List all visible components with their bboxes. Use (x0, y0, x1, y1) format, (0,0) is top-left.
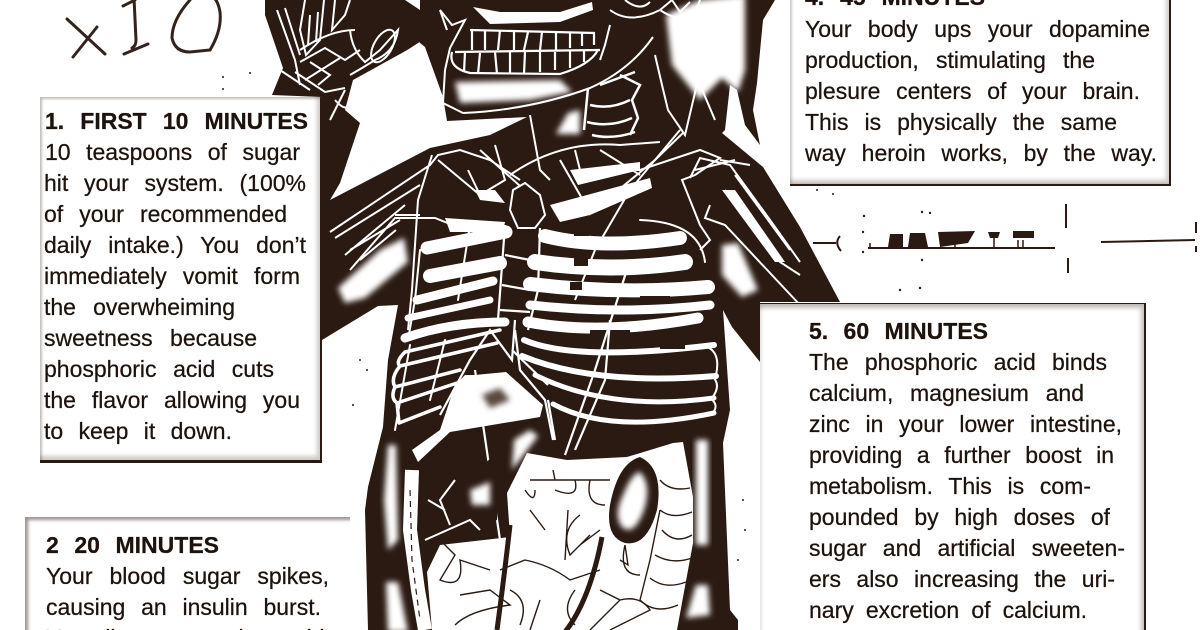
text: 60 minutes: providing a further boost in (809, 442, 1114, 468)
text: 45 minutes: plesure centers of your brain. (805, 78, 1140, 104)
hand bones (277, 0, 420, 120)
text: 60 minutes: ers also increasing the uri- (809, 566, 1115, 592)
text: 60 minutes: pounded by high doses of (809, 504, 1110, 530)
text: 45 minutes: Your body ups your dopamine (805, 16, 1150, 42)
panel 1: first 10 minutes (40, 97, 322, 463)
right ribs (522, 220, 717, 422)
text: 60 minutes: metabolism. This is com- (809, 473, 1091, 499)
bowel folds (425, 470, 692, 630)
text: first 10 minutes: hit your system. (100% (44, 170, 306, 196)
neck vertebrae (584, 72, 640, 137)
text: 60 minutes: 5. 60 MINUTES (809, 318, 988, 344)
panel 4: 45 minutes (790, 0, 1171, 186)
text: first 10 minutes: phosphoric acid cuts (44, 356, 274, 382)
text: 60 minutes: sugar and artificial sweeten- (809, 535, 1125, 561)
text: 60 minutes: The phosphoric acid binds (809, 349, 1107, 375)
print specks (222, 72, 931, 561)
text: first 10 minutes: sweetness because (44, 325, 257, 351)
ureters (497, 525, 602, 630)
spine and central lines (440, 225, 630, 540)
text: 20 minutes: Your blood sugar spikes, (46, 563, 329, 589)
kidneys (455, 450, 659, 543)
mouth and teeth (451, 30, 600, 74)
intestine mass (427, 442, 693, 630)
text: 45 minutes: This is physically the same (805, 109, 1117, 135)
descending bone strip (410, 470, 425, 630)
jaw and skull outline (440, 0, 715, 205)
left ribs (393, 225, 506, 430)
liver shadow (482, 388, 510, 408)
white gap between hand and shoulder (330, 43, 527, 200)
text: first 10 minutes: to keep it down. (44, 418, 232, 444)
bone strip hatching (410, 490, 420, 620)
highlights on neck, arms and torso (338, 0, 758, 630)
sternum outline (510, 183, 545, 228)
text: first 10 minutes: the flavor allowing you (44, 387, 300, 413)
body silhouette (265, 0, 840, 630)
syringe (813, 204, 1196, 273)
text: 60 minutes: zinc in your lower intestine, (809, 411, 1122, 437)
collar bones and shoulders (330, 115, 800, 330)
text: 45 minutes: way heroin works, by the way. (805, 140, 1157, 166)
text: first 10 minutes: daily intake.) You don’t (44, 232, 306, 258)
text: first 10 minutes: of your recommended (44, 201, 287, 227)
text: 45 minutes: production, stimulating the (805, 47, 1095, 73)
text: 60 minutes: nary excretion of calcium. (809, 597, 1087, 623)
liver wedge (412, 372, 543, 462)
text: first 10 minutes: the overwheiming (44, 294, 235, 320)
text: first 10 minutes: 1. FIRST 10 MINUTES (45, 108, 308, 134)
text: 20 minutes: 2 20 MINUTES (46, 532, 219, 558)
shoulder white wedges (445, 162, 785, 262)
dark rib bars (570, 228, 685, 349)
text: first 10 minutes: immediately vomit form (44, 263, 300, 289)
text: first 10 minutes: 10 teaspoons of sugar (45, 139, 300, 165)
panel 2: 20 minutes (25, 517, 350, 630)
handwritten x10 (67, 0, 220, 57)
text: 60 minutes: calcium, magnesium and (809, 380, 1084, 406)
panel 5: 60 minutes (760, 303, 1146, 630)
text: 20 minutes: causing an insulin burst. (46, 594, 321, 620)
